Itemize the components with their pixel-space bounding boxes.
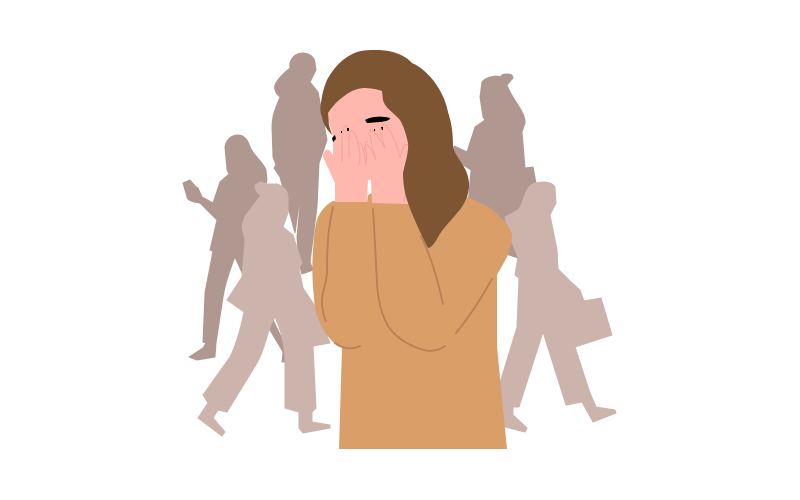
main figure: woman <box>312 50 512 449</box>
eyebrow and lashes <box>332 117 390 142</box>
sweater <box>312 197 512 449</box>
silhouette: person holding phone, back left <box>183 135 287 362</box>
silhouette: person with hair bun, back right <box>452 74 536 258</box>
silhouette: standing person, back left <box>272 53 327 274</box>
face and hands <box>323 84 412 204</box>
hands finger lines <box>342 124 408 202</box>
silhouette: person carrying a bag, front right <box>500 182 616 432</box>
sweater fold lines <box>322 207 492 351</box>
sweater collar <box>367 193 373 203</box>
hair <box>320 50 469 248</box>
silhouette: person with handbag, front left <box>198 182 330 436</box>
